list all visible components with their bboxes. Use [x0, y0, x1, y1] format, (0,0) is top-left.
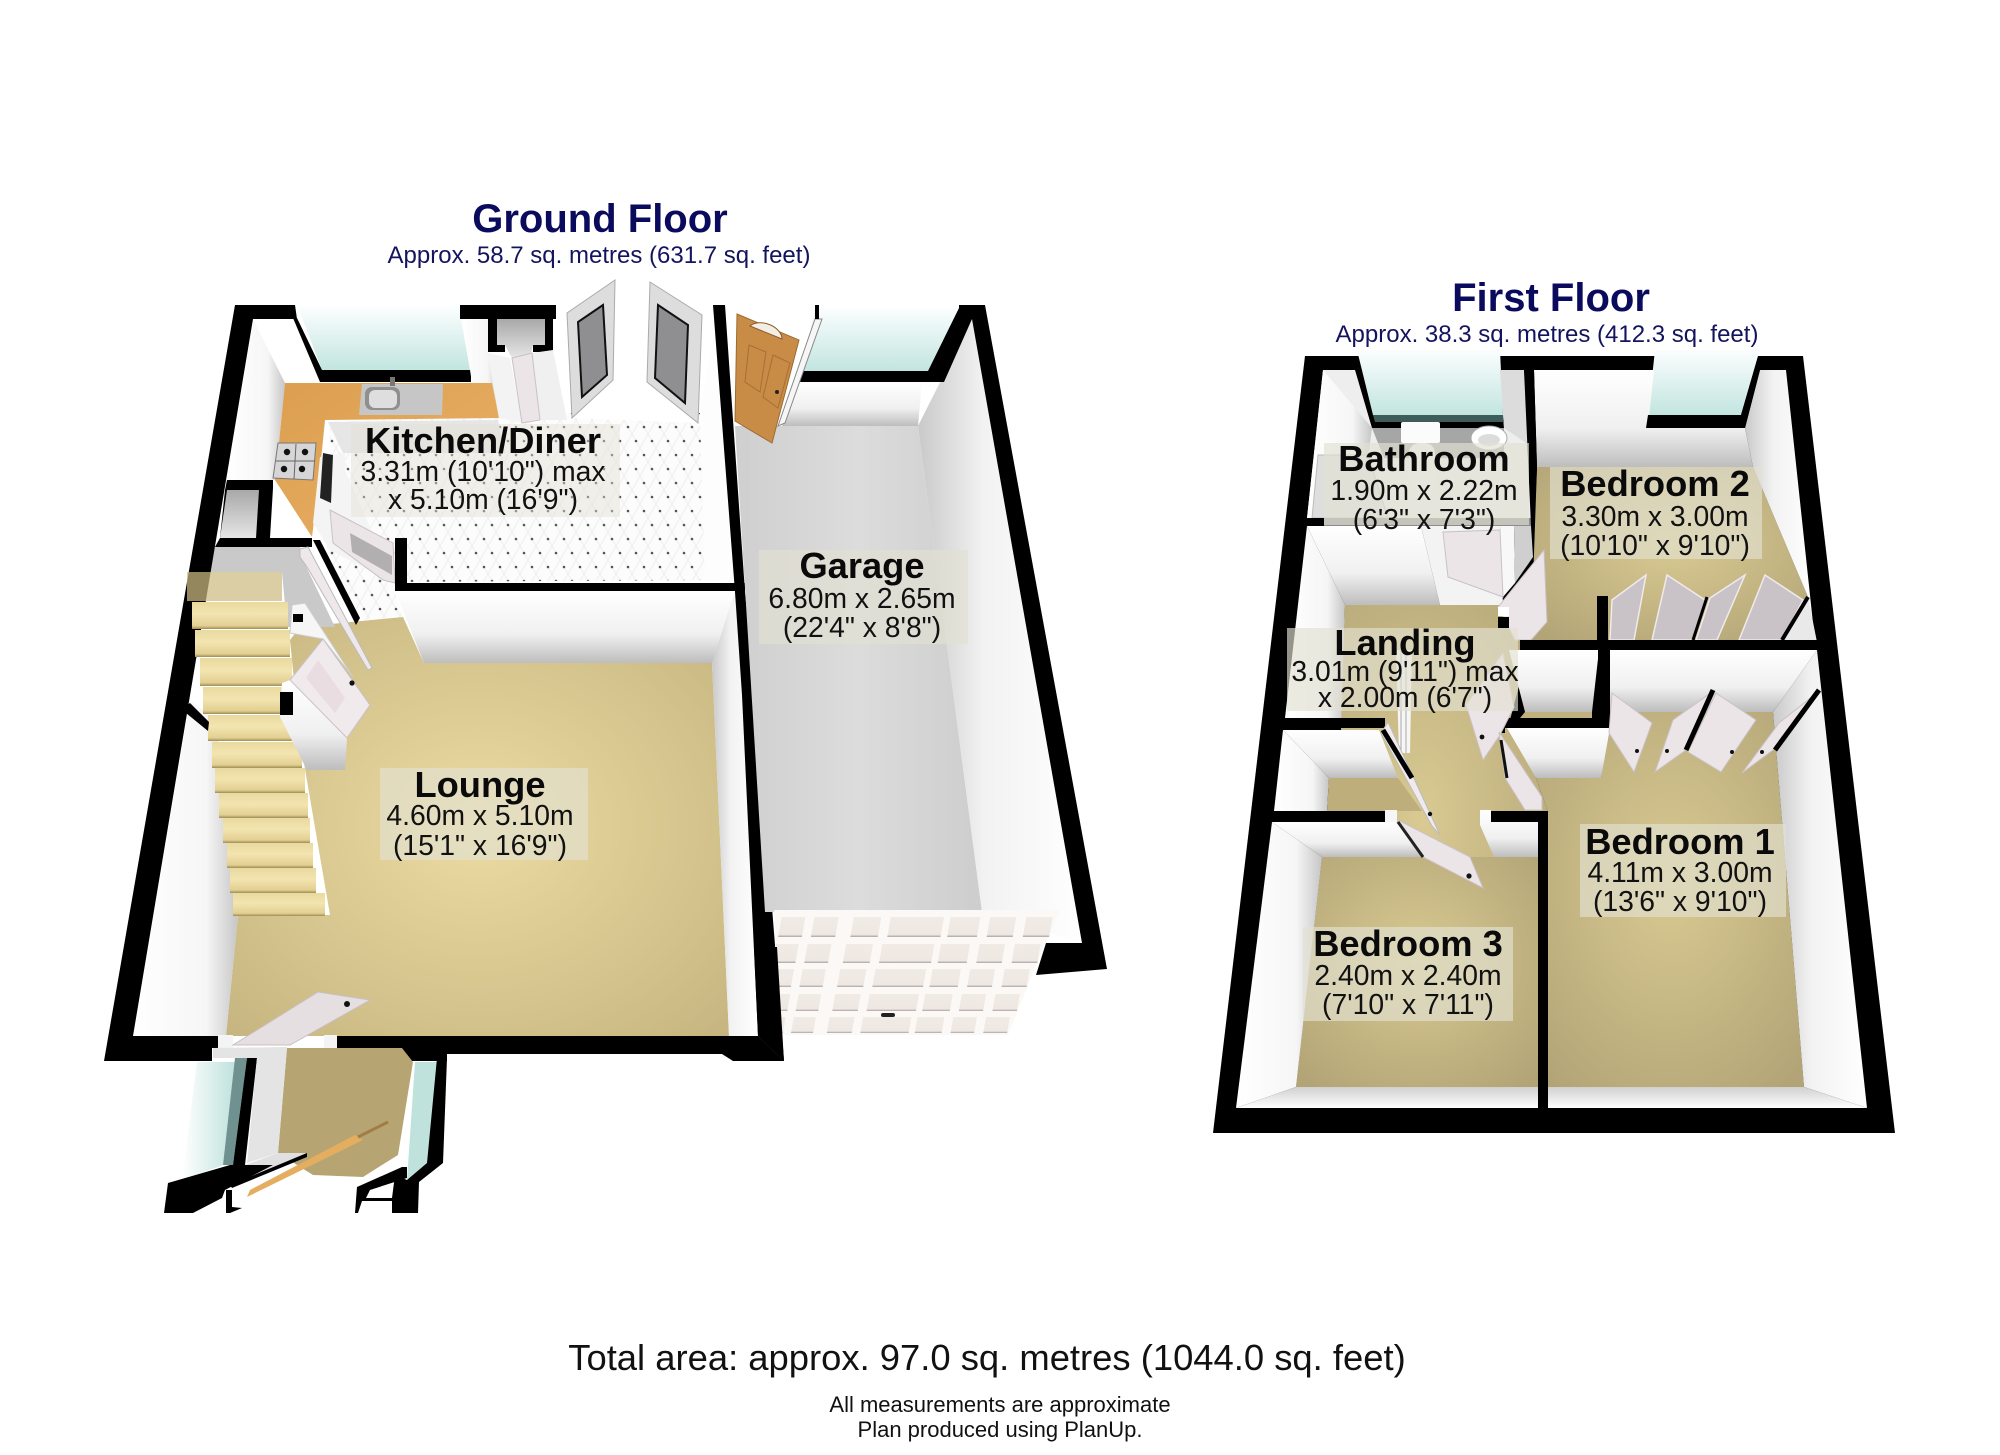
- label: bedroom 2: Bedroom 2: [1560, 463, 1750, 504]
- kitchen floor: [327, 413, 705, 620]
- wall beside bathroom door white: [1500, 526, 1515, 597]
- label: landing: Landing: [1334, 622, 1476, 663]
- bathroom interior: [1307, 370, 1531, 518]
- plan: ground floor: [104, 280, 1107, 1213]
- hall return wall: [1480, 810, 1538, 857]
- garage right wall: [918, 319, 1082, 943]
- understairs cupboard: [215, 480, 312, 547]
- label: bedroom 2: (10'10" x 9'10"): [1560, 529, 1750, 561]
- porch floor: [278, 1048, 413, 1177]
- garage side door: [735, 314, 799, 443]
- bedroom one floor: [1536, 712, 1804, 1087]
- kitchen right wall: [700, 319, 735, 584]
- porch right base: [355, 1167, 407, 1213]
- label: bedroom 1: [1580, 821, 1786, 917]
- white base of kitchen and hall: [215, 319, 735, 620]
- kitchen tall unit right side: [532, 350, 567, 420]
- heading: ground floor: [388, 197, 810, 269]
- landing and hall floor: [1296, 605, 1548, 1087]
- heading: ground floor: Ground Floor: [472, 197, 728, 241]
- porch right glass: [407, 1062, 437, 1180]
- garage floor: [735, 426, 982, 912]
- bedroom two corner wedge: [1782, 597, 1817, 642]
- lounge back wall: [395, 591, 745, 663]
- linen closet: [1274, 718, 1422, 811]
- porch left glass edge: [223, 1058, 247, 1165]
- landing door jamb: [1498, 607, 1509, 628]
- footnote: [829, 1392, 1171, 1442]
- bedroom one front wall: [1548, 1087, 1867, 1108]
- bedroom three floor: [1296, 857, 1538, 1087]
- label: bedroom 3: [1303, 923, 1513, 1021]
- garage up and over door: [761, 910, 1060, 1035]
- label: bathroom: [1324, 438, 1529, 535]
- label: kitchen diner: Kitchen/Diner: [365, 420, 601, 461]
- label: bedroom 1: 4.11m x 3.00m: [1587, 856, 1773, 888]
- label: bedroom 3: Bedroom 3: [1313, 923, 1503, 964]
- tall unit door: [512, 353, 540, 423]
- bedroom one wardrobe doors: [1609, 690, 1819, 773]
- porch left wall: [213, 1047, 287, 1163]
- porch door frame: [226, 1190, 242, 1213]
- kitchen inner door: [330, 510, 395, 583]
- balustrade: [1396, 650, 1412, 753]
- bathroom bottom wall: [1304, 518, 1531, 526]
- closet door: [1381, 722, 1440, 835]
- label: landing: [1287, 622, 1519, 713]
- wardrobe lower wall: [1507, 728, 1610, 778]
- label: landing: x 2.00m (6'7"): [1318, 681, 1492, 713]
- bath: [1312, 455, 1388, 518]
- kitchen oven: [320, 453, 333, 503]
- bathroom back wall: [1372, 428, 1504, 458]
- bedroom two door: [1498, 550, 1547, 640]
- heading: first floor: Approx. 38.3 sq. metres (412.3 sq. feet): [1336, 321, 1758, 348]
- walls around bedroom three: [1270, 811, 1548, 1111]
- wardrobe cupboard wall upper: [1509, 650, 1599, 712]
- white block beside stairs: [280, 680, 347, 770]
- porch threshold: [230, 1153, 307, 1185]
- total area: Total area: approx. 97.0 sq. metres (1044.0 sq. feet): [568, 1337, 1406, 1378]
- lounge front wall: [337, 1036, 784, 1061]
- kitchen cupboard white wall: [267, 483, 312, 538]
- wall between bathroom and bedroom two: [1524, 370, 1537, 526]
- lounge front door: [233, 992, 370, 1045]
- label: garage: Garage: [799, 545, 925, 586]
- lounge left wall below stairs: [133, 700, 238, 1036]
- kitchen worktop: [275, 383, 499, 537]
- kitchen closet block: [460, 305, 556, 358]
- kitchen left wall: [227, 319, 285, 480]
- white wall behind stair door: [290, 603, 353, 677]
- label: kitchen diner: 3.31m (10'10") max: [360, 455, 606, 487]
- lower kitchen units: [313, 453, 395, 584]
- garage window: [802, 308, 960, 371]
- porch threshold strip: [230, 1153, 307, 1188]
- stairs: [187, 572, 325, 916]
- label: bathroom: (6'3" x 7'3"): [1353, 503, 1495, 535]
- bedroom two window sill: [1646, 356, 1770, 428]
- hall grey wall: [207, 547, 335, 627]
- bedroom three door: [1398, 820, 1483, 888]
- label: bedroom 3: 2.40m x 2.40m: [1314, 959, 1502, 991]
- french door left: [567, 280, 615, 418]
- interior black walls middle: [1496, 640, 1818, 733]
- label: lounge: Lounge: [414, 764, 546, 805]
- kitchen tall unit white side: [488, 353, 522, 423]
- bathroom left wall: [1307, 370, 1372, 518]
- label: garage: (22'4" x 8'8"): [783, 611, 941, 643]
- plan: first floor: [1213, 350, 1895, 1133]
- porch right wall black: [392, 1058, 447, 1213]
- bathroom doorway tiles: [1421, 526, 1503, 605]
- label: bedroom 1: Bedroom 1: [1585, 821, 1775, 862]
- garage back wall: [782, 382, 922, 426]
- stair wall stub: [186, 703, 209, 731]
- wall over garage door edge: [754, 947, 784, 1061]
- footnote: Plan produced using PlanUp.: [858, 1417, 1142, 1442]
- wall beside bathroom door grey: [1514, 526, 1533, 583]
- front wall door frames: [218, 1035, 337, 1049]
- bedroom two floor: [1531, 467, 1815, 640]
- label: garage: 6.80m x 2.65m: [768, 582, 956, 614]
- label: kitchen diner: x 5.10m (16'9"): [388, 483, 578, 515]
- porch door leaf: [247, 1122, 388, 1197]
- label: garage: [759, 545, 968, 644]
- label: lounge: 4.60m x 5.10m: [386, 799, 574, 831]
- label: kitchen diner: [351, 420, 620, 517]
- label: bathroom: 1.90m x 2.22m: [1330, 474, 1518, 506]
- bathroom window: [1357, 350, 1503, 415]
- wall right of kitchen window: [461, 319, 499, 418]
- bathroom window lower strip: [1373, 415, 1503, 422]
- kitchen base units: [328, 420, 505, 453]
- heading: ground floor: Approx. 58.7 sq. metres (631.7 sq. feet): [388, 242, 810, 269]
- basin: [1471, 426, 1507, 450]
- bedroom two wardrobe doors: [1597, 575, 1808, 642]
- landing door: [1466, 653, 1514, 760]
- label: bedroom 1: (13'6" x 9'10"): [1593, 885, 1767, 917]
- landing back wall: [1307, 526, 1440, 605]
- french door right: [647, 282, 702, 423]
- garage window sill: [800, 308, 972, 382]
- bathroom door: [1443, 530, 1503, 597]
- porch: [164, 1047, 447, 1213]
- bedroom one back wall: [1610, 650, 1817, 712]
- bathroom side wall: [1500, 370, 1529, 445]
- bedroom three left wall: [1236, 822, 1322, 1108]
- porch left base: [164, 1165, 273, 1213]
- heading: first floor: First Floor: [1452, 276, 1650, 320]
- footnote: All measurements are approximate: [829, 1392, 1171, 1417]
- bedroom two window: [1648, 350, 1760, 415]
- kitchen window sill: [293, 318, 471, 382]
- wardrobe cupboard floor: [1520, 712, 1592, 718]
- label: bathroom: Bathroom: [1338, 438, 1510, 479]
- hall door edge: [300, 540, 372, 670]
- bedroom three front wall: [1236, 1087, 1538, 1108]
- kitchen lounge wall: [395, 538, 745, 591]
- doorway floor wedge: [572, 380, 698, 423]
- lounge right wall: [712, 591, 758, 1036]
- bedroom two back wall: [1534, 370, 1753, 467]
- landing left wall: [1285, 526, 1345, 718]
- label: bedroom 3: (7'10" x 7'11"): [1322, 988, 1494, 1020]
- garage right outer wall: [959, 305, 1107, 975]
- porch left glass: [182, 1062, 235, 1180]
- toilet: [1401, 422, 1440, 490]
- label: bedroom 2: 3.30m x 3.00m: [1561, 500, 1749, 532]
- label: lounge: [380, 764, 588, 861]
- label: lounge: (15'1" x 16'9"): [393, 829, 567, 861]
- bedroom two right wall: [1745, 370, 1815, 642]
- heading: first floor: [1336, 276, 1758, 348]
- left outer wall: [104, 305, 297, 1061]
- kitchen window: [298, 307, 470, 370]
- outer walls: [1213, 356, 1895, 1133]
- bedroom one door: [1499, 732, 1542, 810]
- kitchen hob: [273, 443, 316, 480]
- label: landing: 3.01m (9'11") max: [1291, 655, 1519, 687]
- central wall between house and garage: [713, 305, 784, 1061]
- bedroom one right wall: [1773, 650, 1867, 1108]
- stair door: [280, 639, 370, 738]
- lounge floor: [226, 617, 729, 1036]
- garage frame: [778, 305, 822, 426]
- kitchen sink: [359, 377, 443, 415]
- bedroom three back wall: [1272, 822, 1423, 857]
- door jamb left: [1385, 810, 1397, 822]
- porch left jamb: [233, 1058, 257, 1165]
- label: bedroom 2: [1550, 463, 1762, 561]
